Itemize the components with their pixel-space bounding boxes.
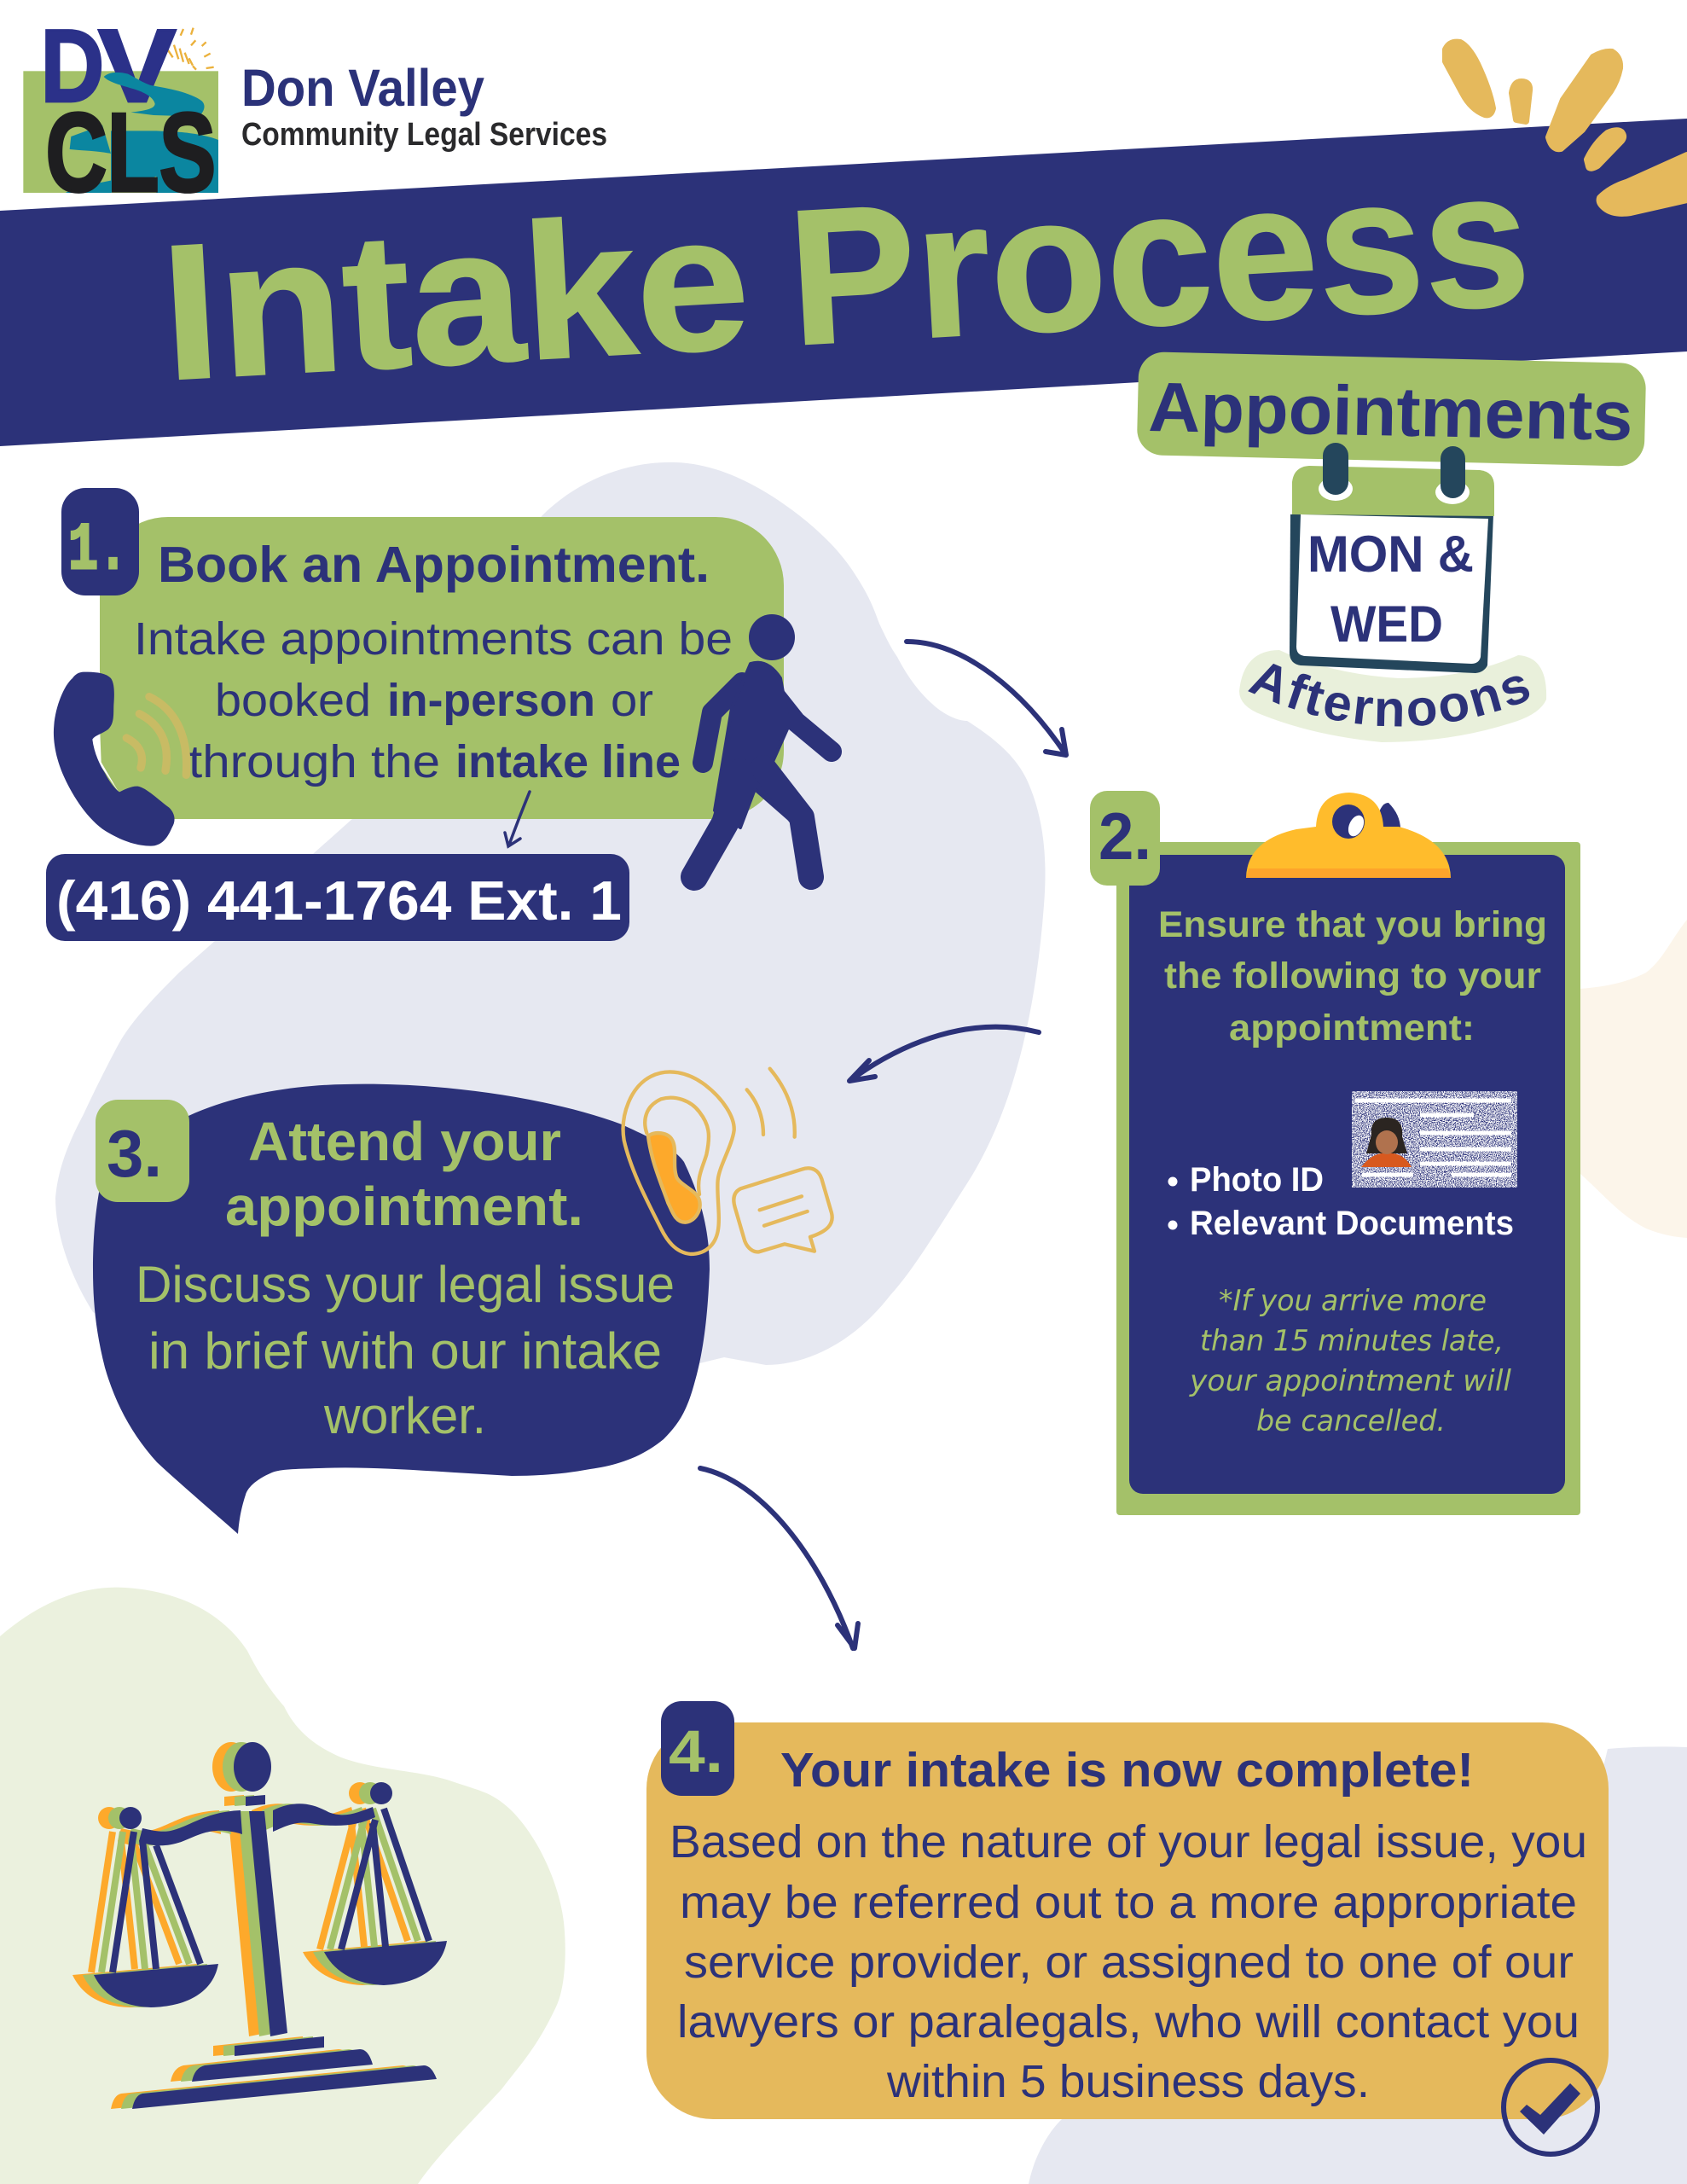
arrow: step 2 to step 3 (849, 1027, 1039, 1081)
step 1 heading: Book an Appointment. (158, 537, 710, 593)
background blob: light green bottom left (0, 1588, 565, 2184)
step 1 body text: intake line (455, 736, 681, 787)
step 1 body text: Intake appointments can be (134, 613, 733, 665)
appointments label: Appointments (1148, 369, 1633, 456)
title: Intake (157, 172, 755, 421)
icon: step 4 badge (661, 1701, 734, 1796)
title (157, 129, 1534, 421)
icon: step 2 badge (1090, 791, 1160, 886)
step 4 body text: lawyers or paralegals, who will contact you (677, 1996, 1580, 2048)
step 1 body text: through the (188, 736, 440, 787)
step 3 heading (225, 1111, 583, 1237)
step 4 body text (670, 1816, 1587, 2107)
icon: step 1 badge: 1. (68, 514, 128, 589)
calendar (1290, 443, 1494, 673)
step 1 body text (134, 613, 733, 787)
step 2 late notice: be cancelled. (1256, 1404, 1446, 1438)
icon: afternoons band (1239, 650, 1546, 742)
icon: step 4 badge: 4. (669, 1718, 723, 1785)
phone number bar: (416) 441-1764 Ext. 1 (56, 869, 622, 932)
logo: DVCLS mark: V (98, 8, 177, 124)
step 3 body text: in brief with our intake (148, 1322, 662, 1380)
step 4 body text: within 5 business days. (886, 2056, 1370, 2107)
panel: step 2 clipboard (1090, 791, 1580, 1515)
step 3 heading: appointment. (225, 1176, 583, 1237)
icon: telephone with sound waves (54, 672, 187, 846)
icon: step 3 badge (96, 1100, 189, 1202)
step 4 body text: service provider, or assigned to one of our (684, 1937, 1574, 1988)
icon: step 1 badge (61, 488, 139, 595)
icon: decorative sparks (1446, 43, 1687, 213)
step 2 heading: appointment: (1229, 1008, 1475, 1048)
icon: clipboard clip (1246, 793, 1451, 878)
step 2 checklist: Relevant Documents (1190, 1205, 1514, 1242)
icon: walking person (694, 614, 832, 877)
step 2 late notice: than 15 minutes late, (1200, 1324, 1504, 1358)
arrow: step 3 to step 4 (700, 1468, 858, 1648)
step 1 body text: or (611, 675, 653, 726)
arrow: to phone number (505, 792, 530, 846)
logo: DVCLS mark: CLS (45, 90, 216, 215)
panel: step 4 intake complete (646, 1701, 1609, 2119)
step 3 heading: Attend your (248, 1111, 561, 1172)
step 3 body text: Discuss your legal issue (136, 1256, 675, 1313)
step 4 body text: may be referred out to a more appropriate (680, 1877, 1577, 1928)
step 2 heading: Ensure that you bring (1158, 904, 1547, 945)
logo: DVCLS mark: D (40, 8, 104, 124)
appointments label (1137, 351, 1646, 467)
step 3 body text (136, 1256, 675, 1444)
step 1 body text: in-person (387, 675, 595, 726)
step 2 late notice: *If you arrive more (1219, 1284, 1487, 1318)
calendar: MON & (1307, 526, 1474, 583)
icon: check mark circle (1504, 2060, 1597, 2154)
step 2 checklist (1168, 1161, 1514, 1242)
step 4 body text: Based on the nature of your legal issue, you (670, 1816, 1587, 1867)
panel: step 3 speech bubble (93, 1084, 710, 1534)
background blob: lavender centre (55, 462, 1046, 1450)
title banner (0, 119, 1687, 446)
step 2 late notice (1189, 1284, 1512, 1438)
arrow: step 1 to step 2 (907, 642, 1066, 755)
step 4 heading: Your intake is now complete! (780, 1743, 1474, 1798)
icon: ear listening (623, 1069, 832, 1254)
step 2 heading: the following to your (1164, 956, 1541, 996)
afternoons text: Afternoons (1248, 664, 1530, 727)
icon: scales of justice (72, 1742, 447, 2109)
icon: photo ID card (1352, 1091, 1517, 1188)
logo: DVCLS mark (23, 8, 218, 215)
background blob: lavender bottom right (1029, 1746, 1687, 2184)
logo wordmark (241, 59, 607, 153)
step 2 checklist: Photo ID (1190, 1161, 1324, 1199)
step 1 body text: booked (215, 675, 371, 726)
icon: step 3 badge: 3. (107, 1116, 162, 1191)
title: Process (784, 129, 1534, 386)
logo wordmark: Don Valley (241, 59, 484, 117)
logo wordmark: Community Legal Services (241, 117, 607, 153)
step 2 late notice: your appointment will (1189, 1364, 1512, 1398)
step 2 heading (1158, 904, 1547, 1048)
icon: step 2 badge: 2. (1099, 799, 1151, 874)
panel: step 1 book an appointment (61, 488, 784, 819)
background blob: cream right (1535, 920, 1687, 1238)
step 3 body text: worker. (323, 1387, 486, 1444)
calendar: WED (1330, 595, 1443, 653)
phone number bar (46, 854, 629, 941)
